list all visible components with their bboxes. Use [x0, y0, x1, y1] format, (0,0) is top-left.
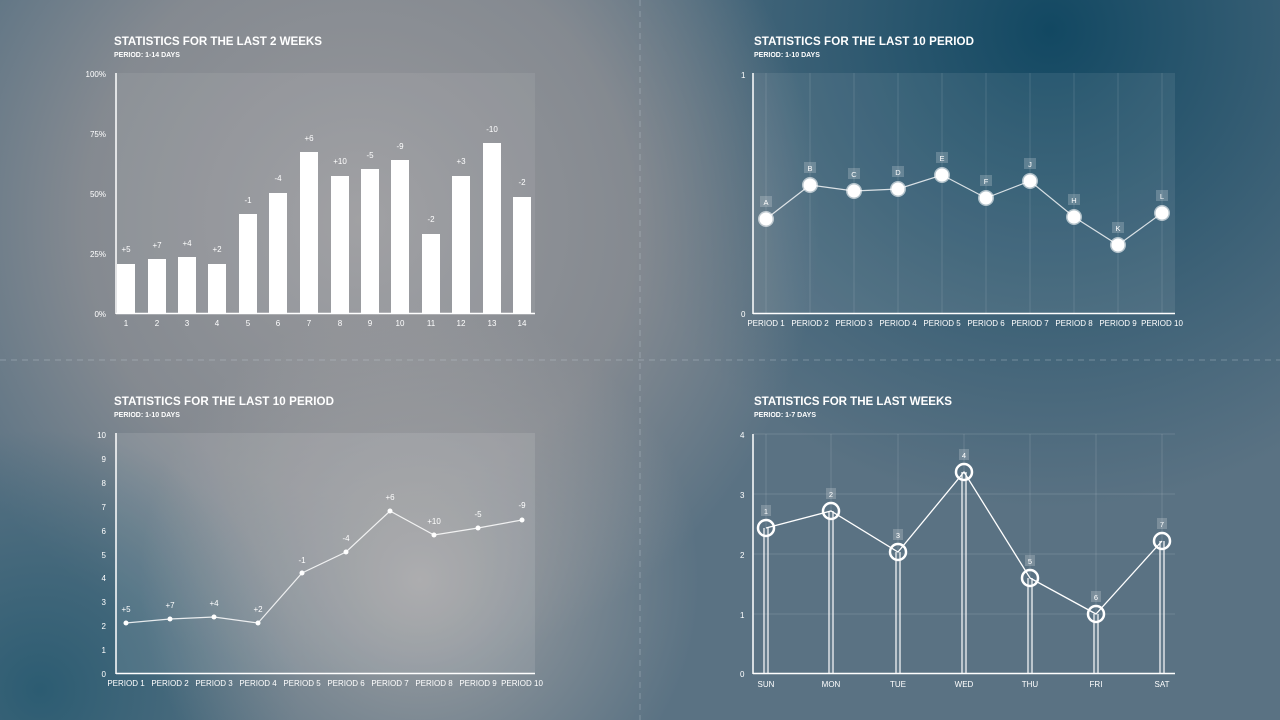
y axis labels: 10 [97, 431, 107, 440]
x axis labels: PERIOD 8 [1055, 319, 1093, 328]
point labels [761, 449, 1167, 602]
x axis labels: MON [822, 680, 841, 689]
y axis labels: 100% [86, 70, 106, 79]
y axis labels: 4 [102, 574, 107, 583]
panel: weekly lollipop chart: 1 [740, 611, 745, 620]
point labels: C [851, 170, 857, 179]
x axis labels: PERIOD 6 [327, 679, 365, 688]
x axis labels: PERIOD 3 [835, 319, 873, 328]
value labels: +7 [165, 601, 175, 610]
x axis labels: PERIOD 5 [283, 679, 321, 688]
point labels: 1 [764, 507, 768, 516]
y axis labels: 50% [90, 190, 106, 199]
x axis labels: TUE [890, 680, 906, 689]
heading: STATISTICS FOR THE LAST 10 PERIOD [754, 35, 974, 48]
bar value labels [121, 125, 526, 254]
x axis labels: 1 [124, 319, 129, 328]
point labels: 2 [829, 490, 833, 499]
y axis labels: 0% [94, 310, 106, 319]
x axis labels: SAT [1155, 680, 1170, 689]
line series [766, 472, 1162, 614]
panel: weekly lollipop chart [740, 395, 1175, 689]
y axis labels: 25% [90, 250, 106, 259]
x axis labels: PERIOD 3 [195, 679, 233, 688]
y axis labels: 3 [102, 598, 107, 607]
y axis labels: 2 [102, 622, 107, 631]
y axis labels [86, 70, 106, 319]
x axis labels: 7 [307, 319, 312, 328]
x axis labels: PERIOD 9 [459, 679, 497, 688]
point labels: 4 [962, 451, 966, 460]
bar value labels: -2 [518, 178, 526, 187]
bar value labels: +2 [212, 245, 222, 254]
x axis labels [124, 319, 527, 328]
x axis labels: PERIOD 2 [791, 319, 829, 328]
panel: weekly lollipop chart: 3 [740, 491, 745, 500]
bar value labels: -4 [274, 174, 282, 183]
subheading: PERIOD: 1-10 DAYS [114, 412, 180, 419]
subheading: PERIOD: 1-14 DAYS [114, 52, 180, 59]
point labels [760, 152, 1168, 233]
x axis labels: 5 [246, 319, 251, 328]
bar value labels: +5 [121, 245, 131, 254]
value labels: -1 [298, 556, 306, 565]
panel: bar chart 2 weeks [86, 35, 535, 328]
y axis labels: 5 [102, 551, 107, 560]
x axis labels: 12 [457, 319, 466, 328]
subheading: PERIOD: 1-10 DAYS [754, 52, 820, 59]
point labels: E [939, 154, 945, 163]
y axis labels: 9 [102, 455, 107, 464]
y axis labels: 6 [102, 527, 107, 536]
x axis labels: 2 [155, 319, 160, 328]
panel: weekly lollipop chart: 0 [740, 670, 745, 679]
y axis labels: 75% [90, 130, 106, 139]
point labels: 3 [896, 531, 900, 540]
x axis labels: PERIOD 9 [1099, 319, 1137, 328]
x axis labels: 11 [427, 319, 436, 328]
x axis labels: FRI [1090, 680, 1102, 689]
point labels: H [1071, 196, 1077, 205]
bar value labels: -9 [396, 142, 404, 151]
y axis labels: 1 [102, 646, 107, 655]
point labels: A [763, 198, 769, 207]
x axis labels [758, 680, 1170, 689]
x axis labels: 3 [185, 319, 190, 328]
bar value labels: +6 [304, 134, 314, 143]
point labels: 7 [1160, 520, 1164, 529]
line series [126, 511, 522, 623]
x axis labels: PERIOD 2 [151, 679, 189, 688]
value labels: +2 [253, 605, 263, 614]
x axis labels: PERIOD 8 [415, 679, 453, 688]
value labels [121, 493, 526, 614]
heading: STATISTICS FOR THE LAST 2 WEEKS [114, 35, 322, 48]
x axis labels: PERIOD 4 [239, 679, 277, 688]
panel: period line chart A-L: 0 [741, 310, 746, 319]
value labels: +10 [427, 517, 441, 526]
point labels: 5 [1028, 557, 1032, 566]
y axis labels: 0 [102, 670, 107, 679]
value labels: -9 [518, 501, 526, 510]
heading: STATISTICS FOR THE LAST 10 PERIOD [114, 395, 334, 408]
bar value labels: +3 [456, 157, 466, 166]
bar value labels: +7 [152, 241, 162, 250]
x axis labels: 10 [396, 319, 405, 328]
x axis labels: PERIOD 7 [1011, 319, 1049, 328]
panel: line chart 0-10 [97, 395, 543, 688]
bar value labels: -10 [486, 125, 498, 134]
x axis labels: PERIOD 5 [923, 319, 961, 328]
heading: STATISTICS FOR THE LAST WEEKS [754, 395, 952, 408]
x axis labels: SUN [758, 680, 775, 689]
x axis labels: 8 [338, 319, 343, 328]
y axis labels: 7 [102, 503, 107, 512]
x axis labels: PERIOD 7 [371, 679, 409, 688]
line series [766, 175, 1162, 245]
bar value labels: +4 [182, 239, 192, 248]
subheading: PERIOD: 1-7 DAYS [754, 412, 816, 419]
value labels: -4 [342, 534, 350, 543]
x axis labels [747, 319, 1183, 328]
x axis labels: PERIOD 1 [747, 319, 785, 328]
x axis labels: 9 [368, 319, 373, 328]
bars [117, 143, 531, 313]
x axis labels [107, 679, 543, 688]
x axis labels: THU [1022, 680, 1038, 689]
y axis labels: 8 [102, 479, 107, 488]
panel: weekly lollipop chart: 2 [740, 551, 745, 560]
value labels: -5 [474, 510, 482, 519]
x axis labels: PERIOD 10 [501, 679, 543, 688]
panel: period line chart A-L: 1 [741, 71, 746, 80]
value labels: +6 [385, 493, 395, 502]
x axis labels: 13 [488, 319, 497, 328]
point labels: 6 [1094, 593, 1098, 602]
x axis labels: WED [955, 680, 974, 689]
data points [760, 168, 1168, 252]
x axis labels: PERIOD 4 [879, 319, 917, 328]
bar value labels: -1 [244, 196, 252, 205]
x axis labels: PERIOD 1 [107, 679, 145, 688]
bar value labels: +10 [333, 157, 347, 166]
x axis labels: 6 [276, 319, 281, 328]
point labels: D [895, 168, 901, 177]
point labels: K [1115, 224, 1121, 233]
bar value labels: -5 [366, 151, 374, 160]
data circles [758, 464, 1170, 622]
y axis labels [97, 431, 107, 679]
point labels: F [984, 177, 989, 186]
value labels: +4 [209, 599, 219, 608]
point labels: L [1160, 192, 1164, 201]
x axis labels: PERIOD 10 [1141, 319, 1183, 328]
point labels: B [807, 164, 813, 173]
stems [764, 472, 1164, 673]
x axis labels: 14 [518, 319, 527, 328]
value labels: +5 [121, 605, 131, 614]
x axis labels: 4 [215, 319, 220, 328]
bar value labels: -2 [427, 215, 435, 224]
point labels: J [1028, 160, 1032, 169]
panel: weekly lollipop chart: 4 [740, 431, 745, 440]
x axis labels: PERIOD 6 [967, 319, 1005, 328]
panel: period line chart A-L [741, 35, 1183, 328]
